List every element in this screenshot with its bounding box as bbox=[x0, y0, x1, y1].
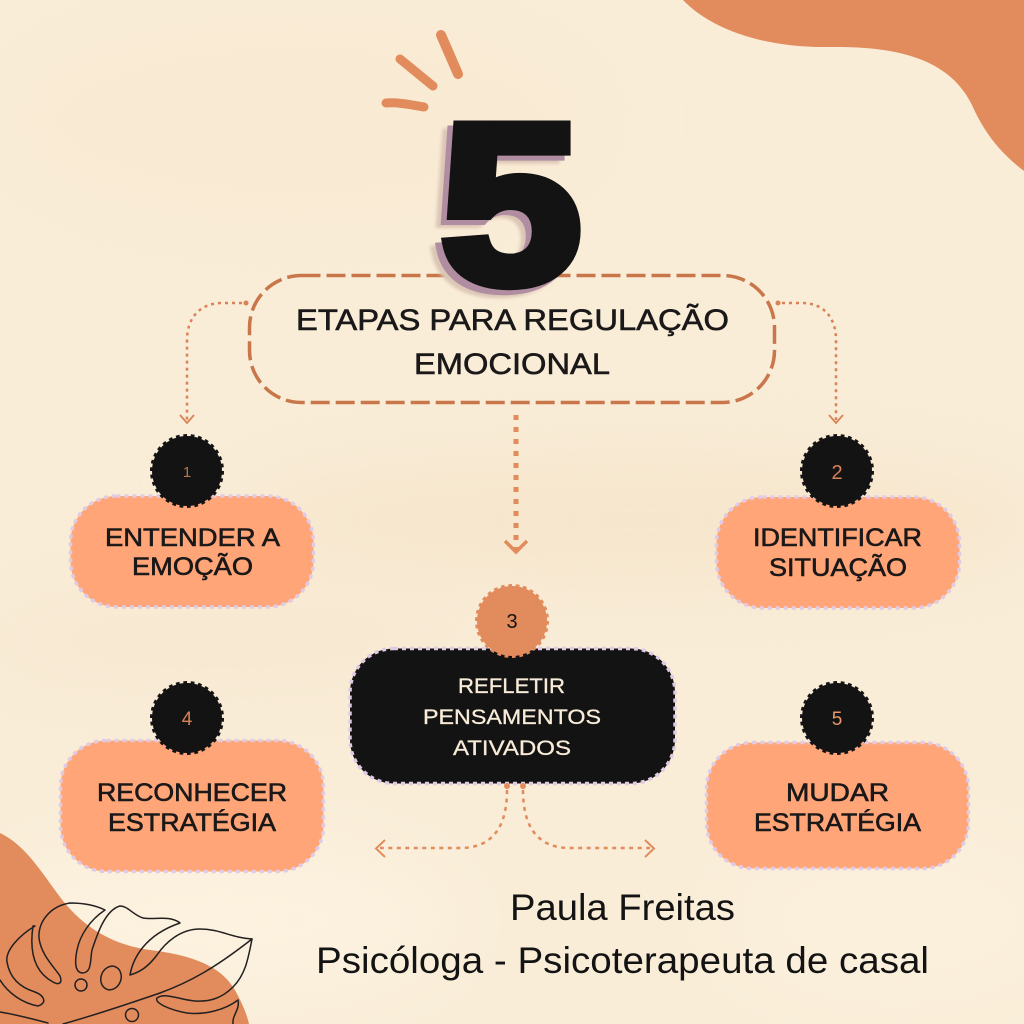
card 2 bbox=[716, 497, 960, 608]
heading: EMOCIONAL bbox=[414, 348, 610, 381]
arrow: split right bbox=[520, 783, 654, 857]
card 5 bbox=[706, 742, 968, 868]
badge 2: 2 bbox=[831, 462, 843, 484]
blob: top right bbox=[683, 0, 1024, 171]
heading: ETAPAS PARA REGULAÇÃO bbox=[296, 303, 729, 337]
card 4 label: RECONHECER bbox=[97, 779, 287, 807]
big number 5: 5 bbox=[441, 77, 581, 330]
badge 3: 3 bbox=[506, 611, 518, 633]
arrow: left to step 1 bbox=[180, 300, 248, 423]
card 2 label: IDENTIFICAR bbox=[753, 524, 922, 552]
card 4 label bbox=[97, 779, 287, 837]
card 1 bbox=[70, 496, 314, 607]
arrow: split left bbox=[376, 783, 510, 857]
card 1 label: ENTENDER A bbox=[105, 524, 280, 552]
heading bbox=[296, 303, 729, 381]
card 5 label bbox=[754, 779, 921, 837]
card 3 label bbox=[423, 674, 601, 760]
badge 4 bbox=[152, 683, 222, 753]
card 2 label bbox=[753, 524, 922, 582]
card 3 label: REFLETIR bbox=[458, 674, 565, 698]
badge 1 bbox=[152, 436, 222, 506]
main dashed frame bbox=[250, 276, 774, 402]
card 5 label: MUDAR bbox=[786, 779, 889, 807]
card 1 label bbox=[105, 524, 280, 581]
card 1 label: EMOÇÃO bbox=[132, 552, 253, 581]
badge 3 bbox=[477, 586, 547, 656]
badge 5 bbox=[802, 683, 872, 753]
badge 4: 4 bbox=[182, 709, 193, 730]
card 3 label: PENSAMENTOS bbox=[423, 705, 601, 729]
card 4 bbox=[60, 740, 324, 872]
big number 5: 5 bbox=[430, 85, 570, 338]
badge 5: 5 bbox=[832, 709, 842, 730]
icon: monstera leaf outline bbox=[0, 903, 252, 1024]
badge 2 bbox=[802, 436, 872, 506]
big number 5: 5 bbox=[435, 82, 575, 335]
arrow: down to step 3 bbox=[505, 415, 527, 552]
arrow: right to step 2 bbox=[776, 300, 843, 423]
card 4 label: ESTRATÉGIA bbox=[108, 808, 276, 837]
badge 1: 1 bbox=[183, 464, 191, 481]
author credit bbox=[316, 887, 929, 981]
icon: spark lines bbox=[386, 35, 458, 107]
card 3 bbox=[350, 648, 675, 784]
card 2 label: SITUAÇÃO bbox=[769, 553, 907, 582]
author credit: Paula Freitas bbox=[510, 887, 735, 928]
card 5 label: ESTRATÉGIA bbox=[754, 808, 921, 837]
card 3 label: ATIVADOS bbox=[453, 736, 571, 760]
author credit: Psicóloga - Psicoterapeuta de casal bbox=[316, 940, 929, 981]
blob: bottom left bbox=[0, 833, 249, 1024]
